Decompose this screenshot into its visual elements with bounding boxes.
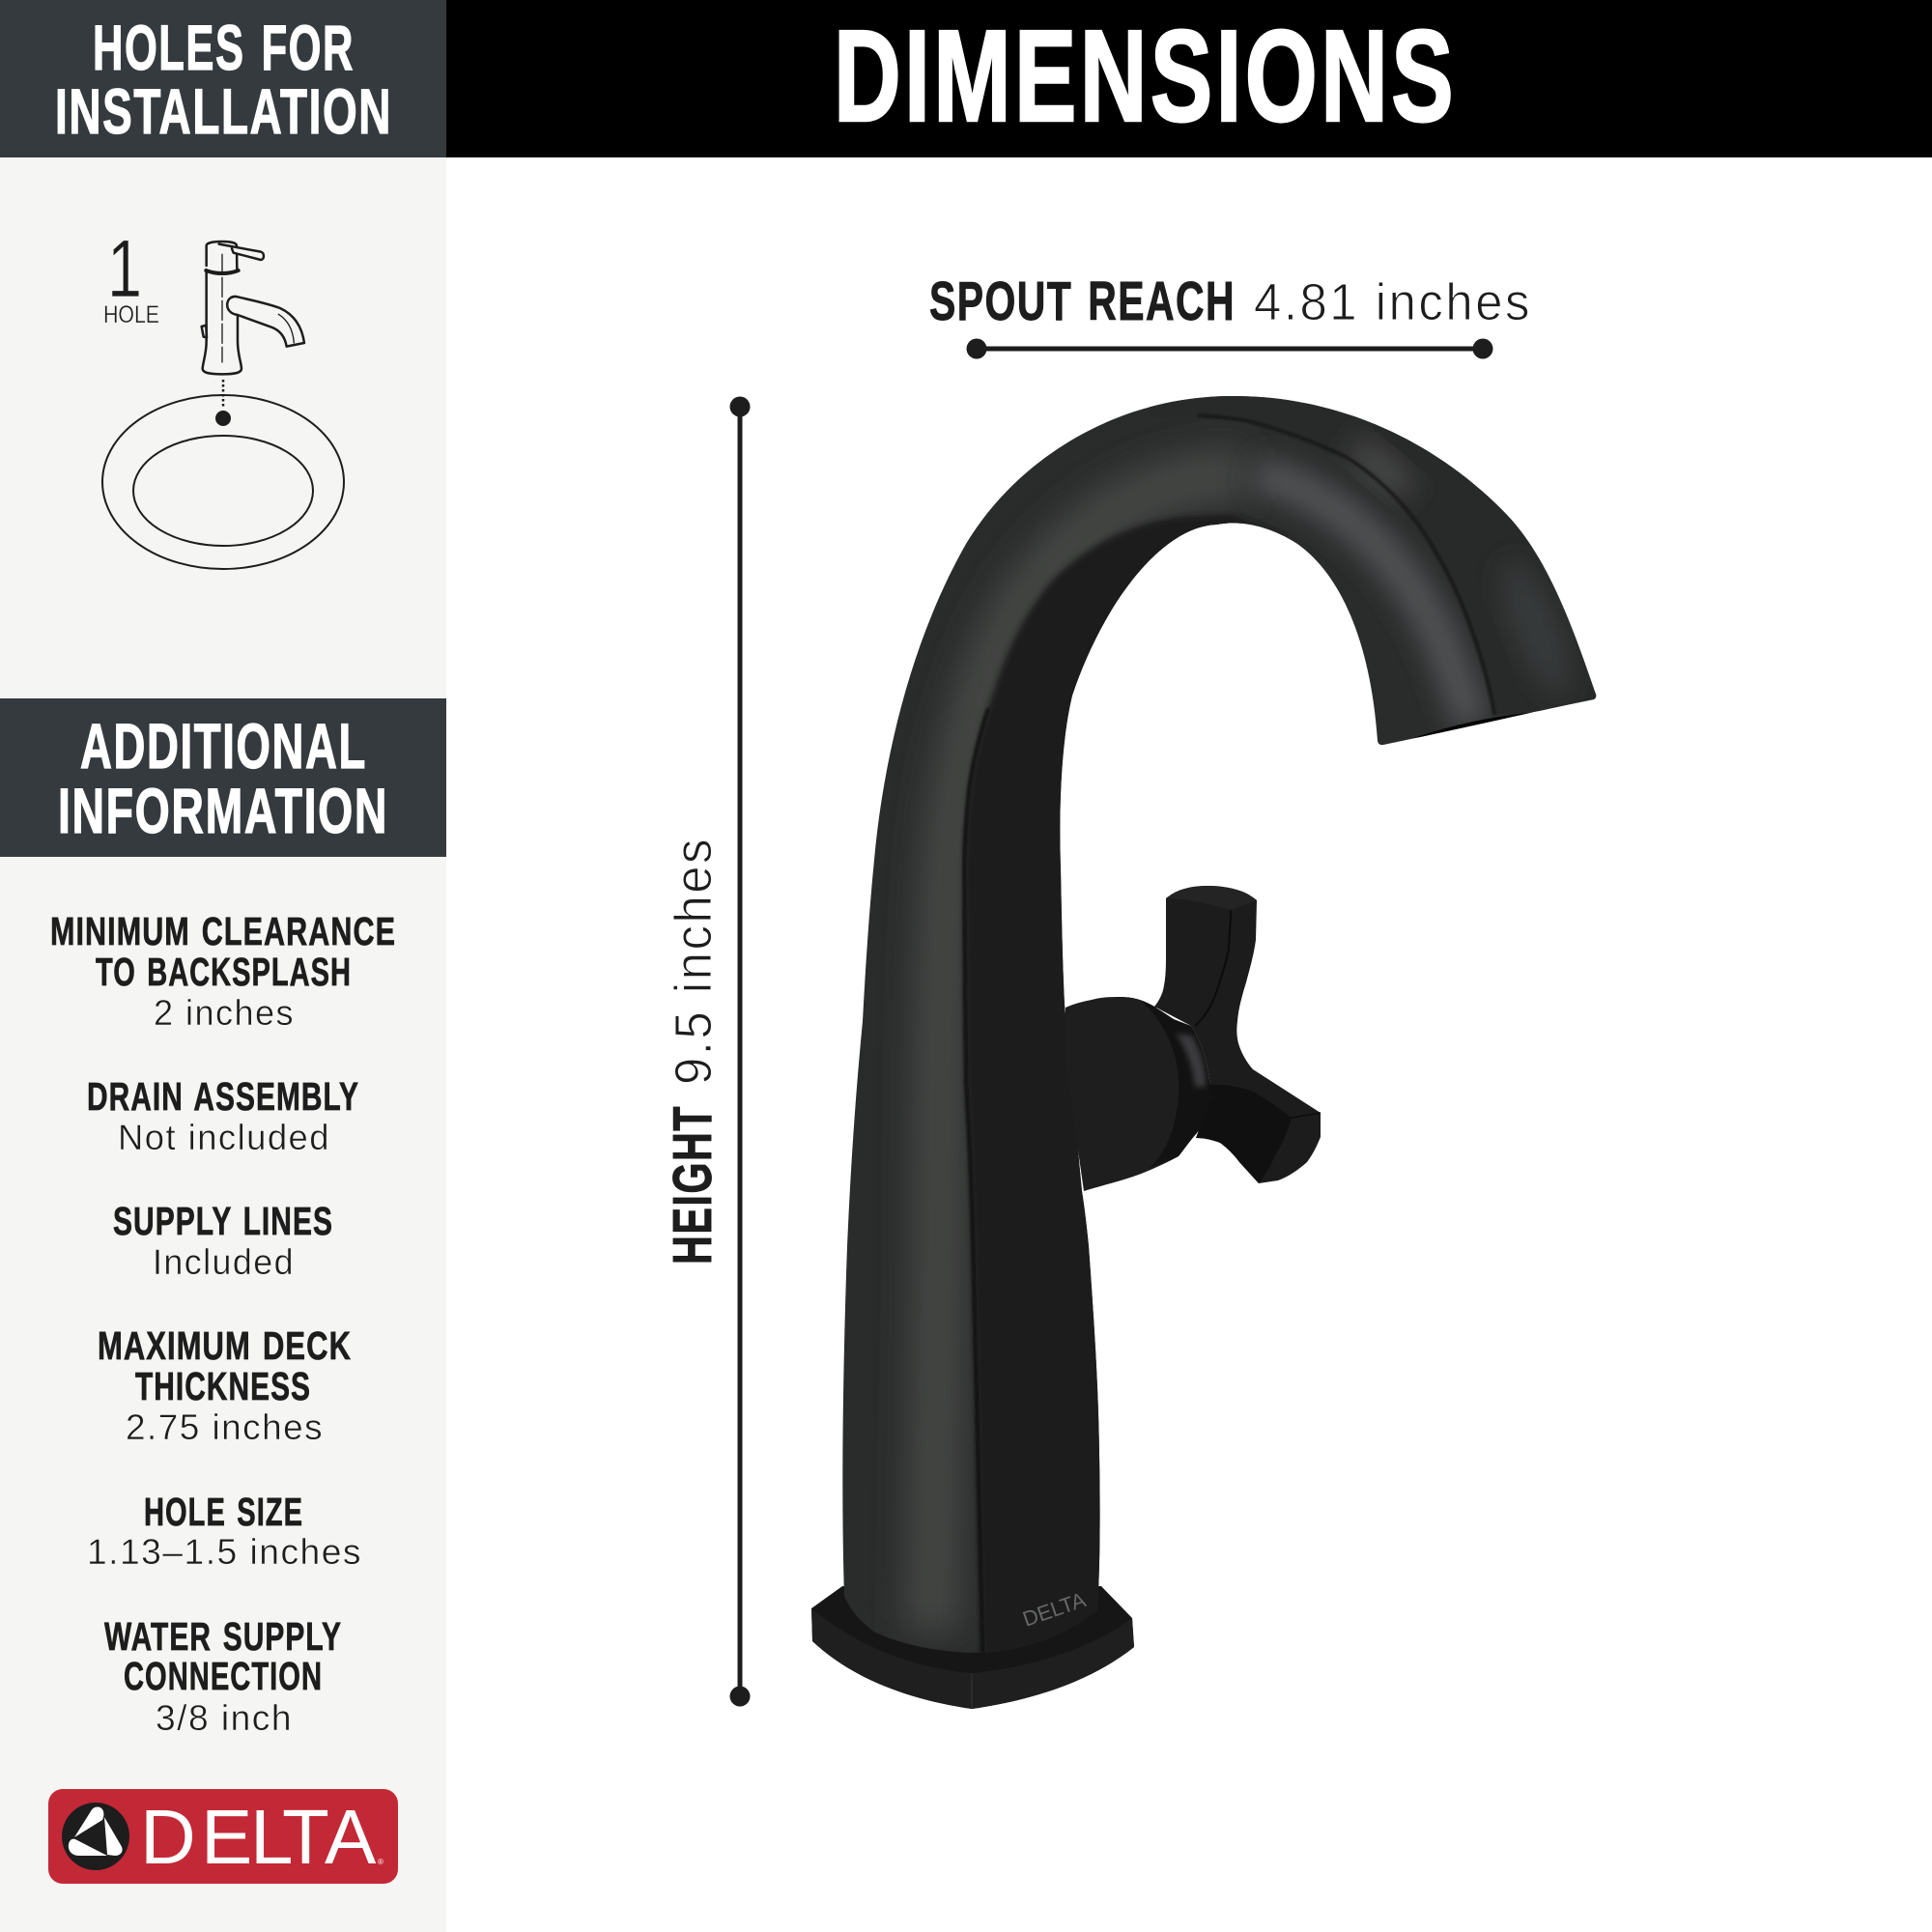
faucet: body seam line — [964, 708, 988, 1653]
text block: supply lines — [113, 1199, 333, 1282]
faucet: lit band on spout — [1256, 473, 1473, 724]
text block: maximum deck thickness — [98, 1323, 352, 1447]
text block: water supply connection — [104, 1614, 342, 1738]
faucet: engraved logo: DELTA — [1019, 1587, 1089, 1632]
text block: drain assembly: Not included — [118, 1118, 330, 1157]
faucet: base plate — [811, 1586, 1134, 1709]
title: dimensions — [446, 0, 1932, 157]
registered mark: ® — [378, 1858, 384, 1866]
text block: minimum clearance — [50, 909, 396, 1033]
label: spout reach: 4.81 inches — [1254, 273, 1532, 331]
illustration: black faucet — [811, 382, 1613, 1709]
label: 1 hole: HOLE — [103, 301, 159, 328]
text block: hole size: HOLE SIZE — [144, 1490, 303, 1534]
heading: additional information: ADDITIONAL — [80, 710, 367, 781]
heading: holes for installation: HOLES FOR — [93, 12, 355, 83]
faucet: spout outer facet — [1150, 382, 1613, 715]
text block: supply lines: SUPPLY LINES — [113, 1199, 333, 1243]
text block: hole size: 1.13–1.5 inches — [87, 1532, 362, 1572]
icon: sink outline — [102, 395, 344, 569]
text block: drain assembly — [87, 1074, 359, 1157]
heading: additional information — [0, 698, 446, 857]
text block: water supply connection: 3/8 inch — [156, 1698, 293, 1738]
text block: drain assembly: DRAIN ASSEMBLY — [87, 1074, 359, 1119]
panel: left sidebar — [0, 0, 446, 1932]
faucet: cross handle — [1154, 886, 1321, 1183]
text block: supply lines: Included — [153, 1242, 295, 1282]
text block: hole size — [87, 1490, 362, 1572]
heading: holes for installation: INSTALLATION — [55, 75, 392, 147]
icon: delta triangle mark — [62, 1803, 129, 1870]
icon: one hole faucet over sink — [102, 223, 344, 569]
icon: line-drawn faucet — [202, 242, 304, 374]
label: height — [662, 837, 724, 1264]
text block: water supply connection: WATER SUPPLY — [104, 1614, 342, 1659]
arrow: spout reach dimension line — [966, 338, 1493, 359]
text block: maximum deck thickness: THICKNESS — [135, 1364, 311, 1408]
title: dimensions: DIMENSIONS — [834, 3, 1457, 149]
faucet: ridge line — [1198, 415, 1494, 715]
faucet: spout tip — [1413, 712, 1539, 738]
logo: delta — [48, 1789, 398, 1884]
heading: additional information: INFORMATION — [58, 775, 388, 846]
faucet: body and spout — [831, 382, 1613, 1671]
label: spout reach: SPOUT REACH — [929, 270, 1236, 332]
label: height: HEIGHT — [662, 1105, 724, 1264]
text block: maximum deck thickness: 2.75 inches — [126, 1407, 324, 1447]
text block: water supply connection: CONNECTION — [124, 1654, 323, 1698]
faucet: outer facet highlight — [1347, 437, 1416, 500]
text block: minimum clearance: 2 inches — [154, 993, 295, 1033]
label: 1 hole — [103, 223, 159, 328]
arrow: height dimension line — [730, 396, 750, 1706]
faucet: outer facet soft light — [1503, 569, 1569, 687]
text block: maximum deck thickness: MAXIMUM DECK — [98, 1323, 352, 1368]
label: height: 9.5 inches — [665, 837, 723, 1085]
text block: minimum clearance: TO BACKSPLASH — [96, 950, 352, 994]
faucet: dark front face — [964, 515, 1285, 1662]
icon: dotted connector and hole — [215, 380, 231, 426]
logo: delta: DELTA — [140, 1794, 377, 1880]
faucet: lit band on body and arch — [932, 473, 1246, 1633]
faucet: handle hub — [1065, 997, 1211, 1191]
text block: minimum clearance: MINIMUM CLEARANCE — [50, 909, 396, 953]
label: 1 hole: 1 — [107, 223, 142, 314]
heading: holes for installation — [0, 0, 446, 157]
